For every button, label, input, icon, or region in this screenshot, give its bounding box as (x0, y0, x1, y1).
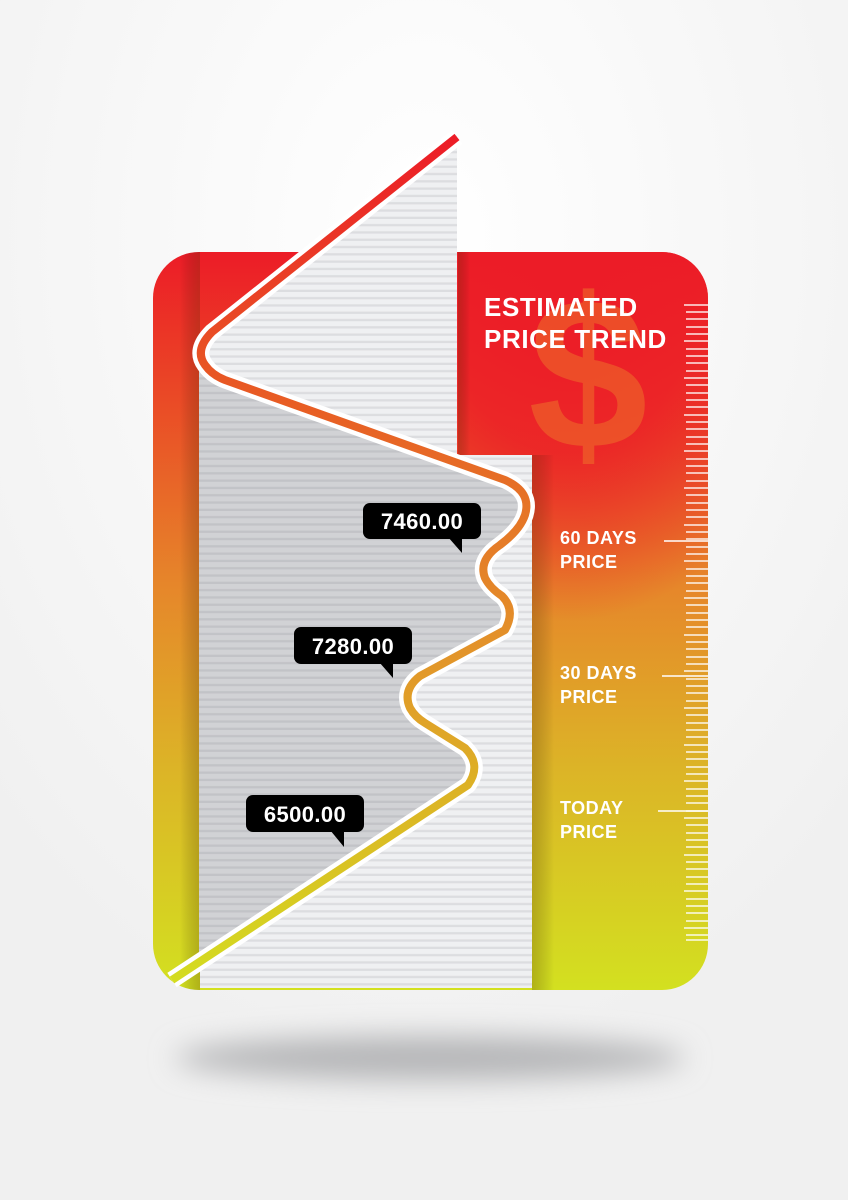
trend line (172, 137, 526, 980)
floor shadow (175, 1036, 685, 1080)
ruler (684, 305, 708, 940)
paper chart (172, 135, 532, 988)
label: 30 days price: PRICE (560, 687, 618, 707)
bubble 7460 (363, 503, 481, 553)
bubble 7280: 7280.00 (312, 634, 394, 659)
bubble 6500: 6500.00 (264, 802, 346, 827)
label: 30 days price: 30 DAYS (560, 663, 637, 683)
label: today price: TODAY (560, 798, 624, 818)
label: today price: PRICE (560, 822, 618, 842)
label: 60 days price (560, 528, 708, 572)
bubble 7280 (294, 627, 412, 678)
dollar sign: $ (528, 253, 648, 494)
title: PRICE TREND (484, 324, 667, 354)
title: ESTIMATED (484, 292, 638, 322)
label: today price (560, 798, 708, 842)
bubble 7460: 7460.00 (381, 509, 463, 534)
card background (153, 252, 708, 990)
label: 30 days price (560, 663, 708, 707)
bubble 6500 (246, 795, 364, 847)
title (484, 292, 667, 354)
label: 60 days price: PRICE (560, 552, 618, 572)
label: 60 days price: 60 DAYS (560, 528, 637, 548)
